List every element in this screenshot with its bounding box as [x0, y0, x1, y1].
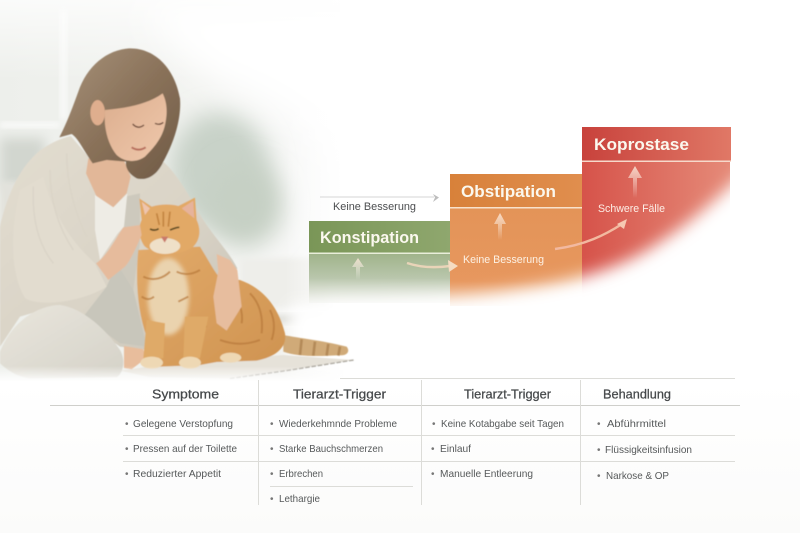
ear — [90, 100, 105, 125]
cat legs and paws — [140, 317, 241, 369]
column: Tierarzt-Trigger 1 — [270, 386, 397, 505]
column: Tierarzt-Trigger 1: Starke Bauchschmerzen — [279, 443, 383, 455]
arrow: Obstipation to Koprostase — [555, 219, 627, 249]
eyes and mouth — [132, 122, 163, 150]
column: Behandlung: Flüssigkeitsinfusion — [605, 444, 692, 456]
step: Konstipation: Konstipation — [320, 228, 419, 247]
column: Tierarzt-Trigger 2: Keine Kotabgabe seit Tagen — [441, 418, 564, 430]
column: Tierarzt-Trigger 2: Einlauf — [440, 443, 471, 455]
column: Tierarzt-Trigger 2: • — [431, 444, 435, 455]
column: Tierarzt-Trigger 2 — [431, 386, 564, 480]
column: Behandlung: • — [597, 471, 601, 482]
column: Tierarzt-Trigger 1: Tierarzt-Trigger — [293, 386, 387, 402]
column: Symptome: • — [125, 419, 129, 430]
column: Tierarzt-Trigger 1: • — [270, 469, 274, 480]
white mist fading the steps — [290, 130, 800, 370]
column: Behandlung: Behandlung — [603, 386, 671, 402]
step: Koprostase — [582, 127, 731, 306]
column: Tierarzt-Trigger 2: • — [431, 469, 435, 480]
stair chart: disease progression — [290, 127, 800, 370]
column: Symptome: • — [125, 444, 129, 455]
fade under photo — [0, 366, 400, 382]
column: Tierarzt-Trigger 2: Tierarzt-Trigger — [464, 386, 552, 402]
hair back — [59, 48, 180, 179]
arrow: Konstipation to Obstipation — [407, 260, 458, 272]
hand on cat back — [213, 254, 242, 331]
table rules — [50, 378, 740, 505]
rug — [120, 355, 354, 379]
arrow: grey Keine Besserung — [320, 194, 439, 202]
column: Tierarzt-Trigger 1: Erbrechen — [279, 468, 323, 480]
cat stripes — [142, 270, 274, 345]
column: Symptome: Reduzierter Appetit — [133, 468, 221, 480]
step: Koprostase: Koprostase — [594, 135, 689, 154]
column: Symptome: Pressen auf der Toilette — [133, 443, 237, 455]
cat body — [137, 247, 285, 367]
step: Konstipation — [309, 221, 450, 303]
cat tail — [283, 335, 348, 356]
label: Keine Besserung top: Keine Besserung — [333, 201, 416, 213]
column: Tierarzt-Trigger 2: • — [432, 419, 436, 430]
table: symptoms and treatment — [50, 378, 740, 505]
hand on cat head — [96, 225, 142, 280]
arrow: up in Obstipation — [494, 213, 506, 240]
photo: woman with orange cat — [0, 48, 354, 379]
column: Tierarzt-Trigger 1: • — [270, 444, 274, 455]
column: Symptome: Gelegene Verstopfung — [133, 418, 233, 430]
column: Behandlung — [597, 386, 692, 482]
column: Behandlung: Narkose & OP — [606, 470, 669, 482]
step: Obstipation — [450, 174, 582, 306]
neck and chest — [86, 158, 131, 207]
step: Obstipation: Obstipation — [461, 182, 556, 201]
cat chest — [148, 258, 189, 335]
column: Tierarzt-Trigger 2: Manuelle Entleerung — [440, 468, 533, 480]
column: Behandlung: Abführmittel — [607, 418, 666, 430]
arrow: up in Konstipation — [352, 258, 364, 280]
column: Tierarzt-Trigger 1: Lethargie — [279, 493, 320, 505]
column: Symptome: • — [125, 469, 129, 480]
photo background: room with plant — [0, 0, 405, 400]
column: Symptome: Symptome — [152, 386, 219, 402]
cat head — [139, 198, 199, 254]
column: Behandlung: • — [597, 419, 601, 430]
arrow: up in Koprostase — [628, 166, 642, 198]
foot — [124, 346, 146, 369]
cardigan — [0, 136, 237, 350]
column: Symptome — [125, 386, 237, 480]
label: Schwere Fälle: Schwere Fälle — [598, 203, 665, 215]
column: Behandlung: • — [597, 445, 601, 456]
face — [105, 93, 167, 161]
column: Tierarzt-Trigger 1: • — [270, 419, 274, 430]
column: Tierarzt-Trigger 1: • — [270, 494, 274, 505]
label: Keine Besserung in Obstipation: Keine Besserung — [463, 254, 544, 266]
pants — [0, 305, 123, 379]
shirt — [95, 193, 127, 260]
column: Tierarzt-Trigger 1: Wiederkehmnde Probleme — [279, 418, 397, 430]
